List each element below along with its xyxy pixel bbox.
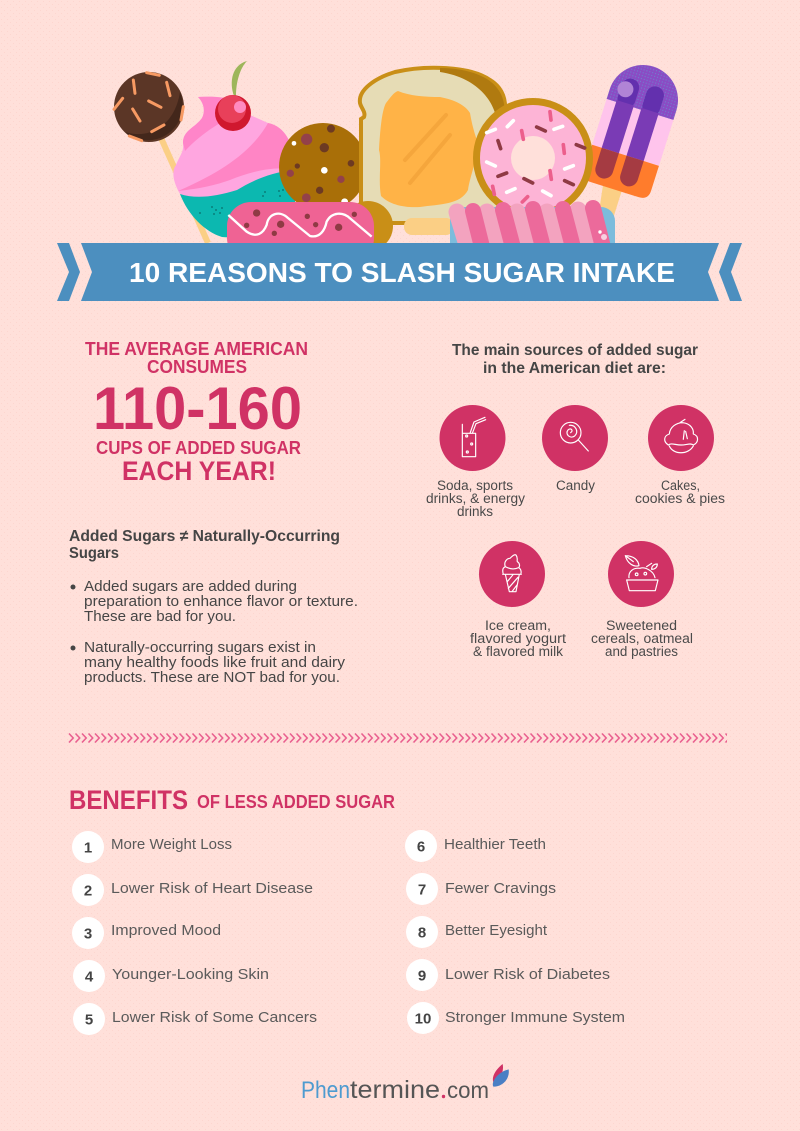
benefit 8 bbox=[406, 916, 548, 948]
source: ice cream: Ice cream, bbox=[485, 618, 551, 633]
source: cereals bbox=[591, 541, 693, 659]
icon: lollipop bbox=[560, 422, 588, 451]
benefit 1: 1 bbox=[84, 840, 92, 856]
banner left chevron bbox=[57, 243, 80, 301]
source: cereals: cereals, oatmeal bbox=[591, 631, 693, 646]
source: ice cream: flavored yogurt bbox=[470, 631, 566, 646]
benefit 1 bbox=[72, 831, 232, 863]
benefit 9: Lower Risk of Diabetes bbox=[445, 966, 610, 983]
source: soda: drinks, & energy bbox=[426, 491, 525, 506]
bullet: added sugars: Added sugars are added during bbox=[84, 578, 297, 595]
banner ribbon bbox=[81, 243, 719, 301]
bullet: natural sugars: Naturally-occurring sugars exist in bbox=[84, 639, 316, 656]
benefit 10 bbox=[407, 1002, 625, 1034]
stat block: average american: 110-160 bbox=[93, 375, 302, 442]
bullet: added sugars: preparation to enhance flavor or texture. bbox=[84, 593, 358, 610]
subheading: Sugars bbox=[69, 545, 119, 562]
donut bbox=[473, 98, 593, 218]
benefit 5: Lower Risk of Some Cancers bbox=[112, 1009, 317, 1026]
benefits list: right column bbox=[405, 830, 625, 1034]
cookie bbox=[279, 123, 367, 211]
benefit 3 bbox=[72, 917, 221, 949]
bread with butter bbox=[360, 68, 505, 235]
source: cereals: and pastries bbox=[605, 644, 678, 659]
cupcake bbox=[173, 61, 295, 237]
eclair bbox=[227, 202, 374, 262]
benefit 9 bbox=[406, 959, 610, 991]
benefit 10: Stronger Immune System bbox=[445, 1009, 625, 1026]
source: candy bbox=[542, 405, 608, 493]
source: soda bbox=[426, 405, 525, 519]
logo wordmark: Phen bbox=[301, 1077, 350, 1104]
benefit 5 bbox=[73, 1003, 317, 1035]
benefit 2 bbox=[72, 874, 313, 906]
logo wordmark: termine bbox=[350, 1076, 440, 1104]
stat block: average american: EACH YEAR! bbox=[122, 456, 276, 486]
illustration: sweets bbox=[114, 56, 687, 262]
logo wordmark: com bbox=[447, 1077, 489, 1103]
stat block: average american: THE AVERAGE AMERICAN bbox=[85, 339, 308, 359]
gold ball bbox=[343, 201, 393, 251]
benefit 6: 6 bbox=[417, 838, 425, 856]
logo wordmark bbox=[301, 1076, 489, 1104]
benefit 4: 4 bbox=[85, 968, 94, 986]
banner right chevron bbox=[719, 243, 742, 301]
benefit 6: Healthier Teeth bbox=[444, 836, 546, 853]
icon: ice cream cone bbox=[503, 555, 521, 592]
candy roll bbox=[450, 207, 615, 257]
benefit 1: More Weight Loss bbox=[111, 836, 232, 853]
heading: benefits: OF LESS ADDED SUGAR bbox=[197, 792, 395, 812]
cake pop bbox=[114, 72, 208, 243]
stat block: average american: CONSUMES bbox=[147, 357, 247, 377]
benefit 7: 7 bbox=[418, 882, 426, 898]
source: cakes: cookies & pies bbox=[635, 491, 725, 506]
bullet: natural sugars: products. These are NOT bad for you. bbox=[84, 669, 340, 686]
title: 10 REASONS TO SLASH SUGAR INTAKE bbox=[129, 257, 675, 288]
subheading: Added Sugars ≠ Naturally-Occurring bbox=[69, 528, 340, 545]
text block: added vs natural sugars bbox=[69, 528, 358, 686]
source: cakes: Cakes, bbox=[661, 478, 700, 493]
source: ice cream bbox=[470, 541, 566, 659]
icon: glass with straw bbox=[462, 417, 486, 457]
bullet: natural sugars: many healthy foods like fruit and dairy bbox=[84, 654, 346, 671]
stat block: average american bbox=[85, 339, 308, 486]
heading: benefits: BENEFITS bbox=[69, 785, 188, 815]
banner bbox=[57, 243, 742, 301]
benefit 10: 10 bbox=[415, 1010, 431, 1028]
stat block: average american: CUPS OF ADDED SUGAR bbox=[96, 438, 301, 458]
benefit 3: Improved Mood bbox=[111, 922, 221, 939]
heading: main sources bbox=[452, 342, 698, 377]
logo bbox=[301, 1064, 509, 1104]
subheading bbox=[69, 528, 340, 562]
source: candy: Candy bbox=[556, 478, 595, 493]
popsicle bbox=[581, 56, 687, 225]
source: cereals: Sweetened bbox=[606, 618, 677, 633]
benefits list: left column bbox=[72, 831, 317, 1035]
benefit 3: 3 bbox=[84, 926, 92, 942]
source: soda: drinks bbox=[457, 504, 493, 519]
heading: main sources: The main sources of added sugar bbox=[452, 342, 698, 359]
icon: cereal bowl bbox=[625, 556, 658, 591]
benefit 7 bbox=[406, 873, 556, 905]
benefit 2: 2 bbox=[84, 882, 92, 900]
benefit 9: 9 bbox=[418, 968, 426, 984]
bullet: natural sugars bbox=[70, 639, 346, 686]
benefit 8: 8 bbox=[418, 924, 426, 942]
benefit 4: Younger-Looking Skin bbox=[112, 966, 269, 983]
benefit 2: Lower Risk of Heart Disease bbox=[111, 880, 313, 897]
logo butterfly bbox=[493, 1064, 509, 1087]
bullet: added sugars bbox=[70, 578, 358, 625]
benefit 8: Better Eyesight bbox=[445, 922, 548, 939]
heading: main sources: in the American diet are: bbox=[483, 360, 666, 377]
benefit 4 bbox=[73, 960, 269, 992]
bullet: added sugars: These are bad for you. bbox=[84, 608, 236, 625]
source: ice cream: & flavored milk bbox=[473, 644, 563, 659]
heading: benefits bbox=[69, 785, 395, 815]
benefit 5: 5 bbox=[85, 1012, 93, 1028]
benefit 6 bbox=[405, 830, 546, 862]
icon: cupcake top bbox=[665, 419, 698, 453]
benefit 7: Fewer Cravings bbox=[445, 880, 556, 897]
source: cakes bbox=[635, 405, 725, 506]
source: soda: Soda, sports bbox=[437, 478, 513, 493]
